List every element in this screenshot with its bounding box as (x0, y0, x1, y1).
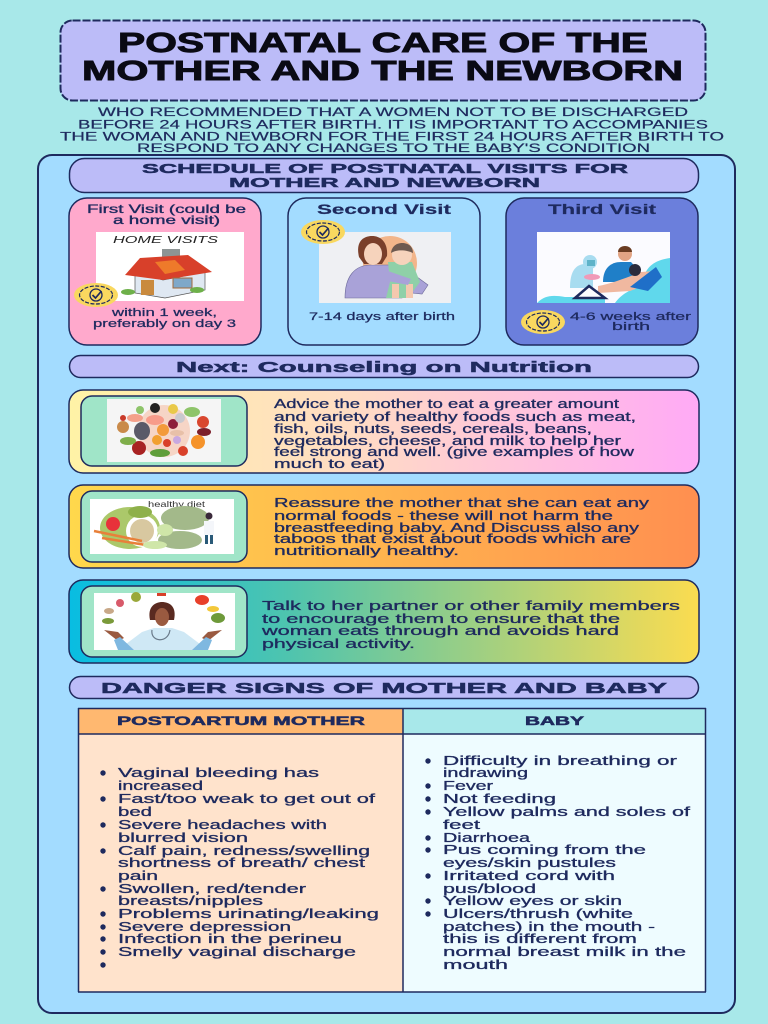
intro text: THE WOMAN AND NEWBORN FOR THE FIRST 24 HOURS AFTER BIRTH TO (60, 130, 724, 144)
nutrition row 3 (69, 580, 699, 663)
list: baby signs: feet (443, 818, 481, 832)
card: third visit: birth (612, 321, 650, 333)
icon: check badge (521, 310, 565, 334)
card: first visit: within 1 week, (110, 307, 217, 319)
nutrition row 1 (69, 390, 699, 473)
text block: vegetables, cheese, and milk to help her (274, 434, 621, 448)
title banner: MOTHER AND THE NEWBORN (82, 55, 683, 86)
main panel (38, 155, 735, 1013)
list: baby signs: Irritated cord with (443, 869, 615, 883)
text block: woman eats through and avoids hard (260, 624, 619, 638)
list: baby signs: Difficulty in breathing or (443, 754, 677, 768)
card: third visit (506, 198, 698, 345)
card: first visit: a home visit) (113, 213, 220, 227)
list: baby signs: Ulcers/thrush (white (443, 907, 633, 921)
card: second visit (288, 198, 480, 345)
list: postpartum mother signs: Calf pain, redness/swelling (118, 844, 370, 858)
heading: schedule of postnatal visits: MOTHER AND NEWBORN (229, 175, 540, 190)
icon: healthy diet illustration (90, 499, 234, 554)
heading: danger signs: DANGER SIGNS OF MOTHER AND BABY (101, 680, 667, 697)
card: third visit: 4-6 weeks after (570, 311, 692, 323)
list: baby signs: Yellow eyes or skin (443, 894, 622, 908)
text block: much to eat) (274, 457, 385, 471)
text block: breastfeeding baby. And Discuss also any (274, 521, 640, 535)
list: baby signs: Diarrhoea (443, 831, 530, 845)
icon: house illustration (96, 232, 244, 301)
text block: taboos that exist about foods which are (274, 532, 631, 546)
list: baby signs: this is different from (443, 932, 637, 946)
intro text (60, 105, 724, 155)
text block: fish, oils, nuts, seeds, cereals, beans, (274, 422, 592, 436)
list: postpartum mother signs: pain (118, 869, 158, 883)
table: danger signs: BABY (525, 714, 584, 728)
icon: mother and baby illustration (319, 232, 451, 303)
heading: danger signs (70, 676, 698, 698)
table: danger signs: POSTOARTUM MOTHER (117, 714, 366, 728)
text block: Talk to her partner or other family members (262, 599, 680, 613)
text block: physical activity. (262, 637, 415, 651)
list: postpartum mother signs: Problems urinating/leaking (118, 907, 379, 921)
list: baby signs: eyes/skin pustules (443, 856, 616, 870)
list: postpartum mother signs: Swollen, red/tender (118, 882, 306, 896)
list: baby signs: patches) in the mouth - (443, 920, 655, 934)
heading: counseling on nutrition: Next: Counseling on Nutrition (176, 359, 592, 376)
text block (274, 397, 636, 471)
list: postpartum mother signs (100, 766, 379, 968)
list: baby signs: Not feeding (443, 792, 556, 806)
text block (260, 599, 680, 651)
text block: normal foods - these will not harm the (274, 509, 613, 523)
list: postpartum mother signs: Vaginal bleeding has (118, 766, 319, 780)
card: third visit: Third Visit (548, 201, 657, 217)
list: postpartum mother signs: Severe depression (118, 920, 291, 934)
list: postpartum mother signs: Fast/too weak to get out of (118, 792, 376, 806)
card: second visit: 7-14 days after birth (309, 311, 455, 323)
list: baby signs: Fever (443, 779, 493, 793)
heading: counseling on nutrition (70, 356, 698, 378)
text block: and variety of healthy foods such as meat, (274, 410, 636, 424)
list: postpartum mother signs: increased (118, 779, 203, 793)
icon: check badge (74, 283, 118, 307)
intro text: BEFORE 24 HOURS AFTER BIRTH. IT IS IMPORTANT TO ACCOMPANIES (78, 118, 708, 132)
list: postpartum mother signs: breasts/nipples (118, 894, 263, 908)
list: baby signs (425, 754, 691, 972)
icon: delivery room illustration (537, 232, 670, 303)
table: danger signs (78, 708, 706, 992)
text block: nutritionally healthy. (274, 544, 459, 558)
list: postpartum mother signs: Severe headaches with (118, 818, 327, 832)
nutrition row 2 (69, 485, 699, 568)
text block: Advice the mother to eat a greater amount (274, 397, 620, 411)
list: postpartum mother signs: bed (118, 805, 152, 819)
list: postpartum mother signs: shortness of breath/ chest (118, 856, 366, 870)
icon: house illustration: HOME VISITS (113, 235, 219, 246)
list: baby signs: normal breast milk in the (443, 945, 686, 959)
list: baby signs: pus/blood (443, 882, 536, 896)
list: baby signs: indrawing (443, 766, 528, 780)
card: first visit: preferably on day 3 (93, 318, 236, 330)
card: first visit (69, 198, 261, 345)
title banner (60, 20, 706, 100)
list: baby signs: mouth (443, 958, 508, 972)
icon: doctor with food (94, 592, 235, 650)
list: baby signs: Pus coming from the (443, 843, 646, 857)
icon: circle of foods (107, 399, 221, 462)
text block: Reassure the mother that she can eat any (274, 496, 650, 510)
card: first visit: First Visit (could be (87, 202, 247, 216)
text block: to encourage them to ensure that the (262, 612, 620, 626)
list: postpartum mother signs: Infection in the perineu (118, 932, 342, 946)
text block (274, 496, 650, 558)
list: postpartum mother signs: blurred vision (118, 831, 248, 845)
heading: schedule of postnatal visits: SCHEDULE OF POSTNATAL VISITS FOR (142, 161, 629, 176)
intro text: RESPOND TO ANY CHANGES TO THE BABY'S CONDITION (137, 141, 650, 155)
heading: schedule of postnatal visits (70, 158, 698, 192)
text block: feel strong and well. (give examples of how (274, 445, 635, 459)
icon: healthy diet illustration: healthy diet (148, 499, 206, 509)
list: postpartum mother signs: Smelly vaginal discharge (118, 945, 356, 959)
icon: check badge (301, 220, 345, 244)
title banner: POSTNATAL CARE OF THE (118, 27, 648, 58)
list: baby signs: Yellow palms and soles of (443, 805, 691, 819)
card: second visit: Second Visit (317, 201, 452, 217)
intro text: WHO RECOMMENDED THAT A WOMEN NOT TO BE DISCHARGED (98, 105, 689, 119)
